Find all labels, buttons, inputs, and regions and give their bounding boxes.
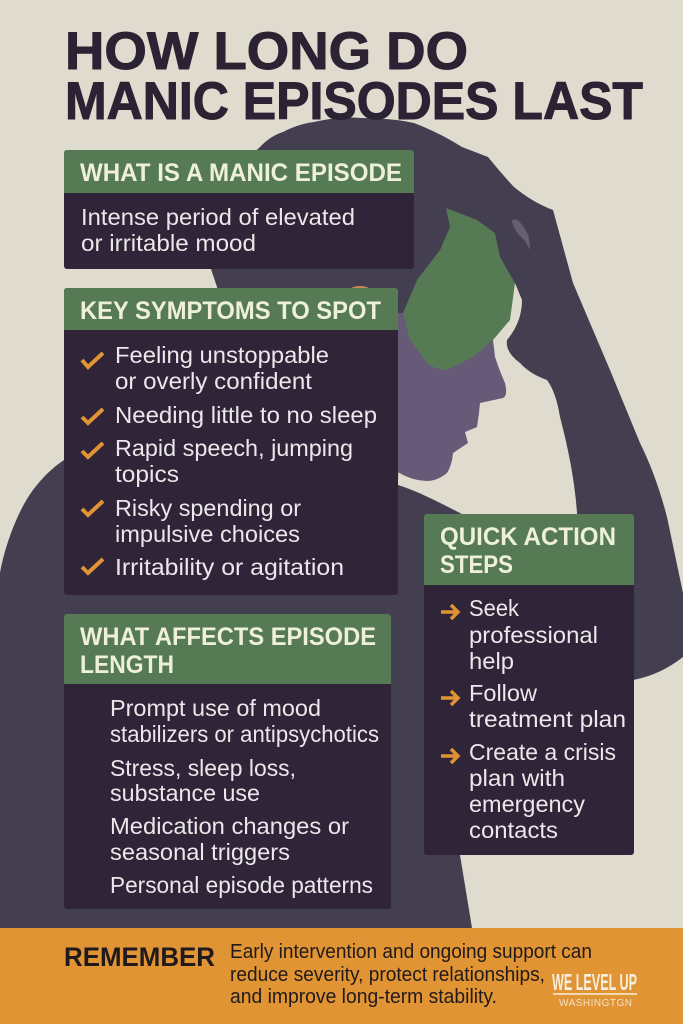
panel: what is a manic episode: WHAT IS A MANIC EPISODE — [80, 159, 402, 187]
silhouette face — [398, 313, 506, 481]
action list: emergency — [469, 791, 586, 817]
logo: WASHINGTGN — [559, 998, 632, 1009]
panel: what affects episode length: LENGTH — [80, 651, 174, 679]
panel: what affects episode length: WHAT AFFECTS EPISODE — [80, 623, 376, 651]
symptom list: Feeling unstoppable — [115, 342, 329, 368]
title: HOW LONG DO — [65, 22, 468, 81]
symptom list: or overly confident — [115, 368, 313, 394]
arrow icons — [441, 605, 458, 763]
panel: quick action steps: QUICK ACTION — [440, 523, 616, 551]
remember label: REMEMBER — [64, 942, 215, 972]
silhouette: person holding head — [0, 118, 683, 928]
symptom list: topics — [115, 461, 179, 487]
panel: what affects episode length: Prompt use of mood — [110, 695, 321, 721]
symptom list: impulsive choices — [115, 521, 300, 547]
panel: what affects episode length: Stress, sleep loss, — [110, 755, 296, 781]
panel: what is a manic episode: Intense period of elevated — [81, 204, 355, 230]
panel: key symptoms — [64, 288, 398, 595]
action list — [469, 595, 626, 843]
title: MANIC EPISODES LAST — [65, 72, 643, 131]
action list: Seek — [469, 595, 519, 621]
panel: what affects episode length: substance use — [110, 780, 260, 806]
remember text — [230, 941, 592, 1008]
green brain shape — [403, 208, 515, 370]
symptom list: Rapid speech, jumping — [115, 435, 353, 461]
panel: what affects episode length: stabilizers or antipsychotics — [110, 721, 379, 747]
silhouette body — [0, 460, 472, 928]
silhouette hair and raised arm — [200, 118, 683, 680]
action list: treatment plan — [469, 706, 626, 732]
action list: Create a crisis — [469, 739, 616, 765]
remember text: Early intervention and ongoing support can — [230, 941, 592, 963]
panel: what is a manic episode — [64, 150, 414, 269]
title — [65, 22, 643, 131]
remember text: and improve long-term stability. — [230, 986, 497, 1008]
action list: help — [469, 648, 514, 674]
logo — [552, 969, 637, 1009]
panel: what affects episode length: Personal episode patterns — [110, 872, 373, 898]
hand highlight — [512, 220, 530, 250]
action list: contacts — [469, 817, 558, 843]
panel: quick action steps: STEPS — [440, 551, 513, 579]
symptom list — [115, 342, 377, 580]
symptom list: Needing little to no sleep — [115, 402, 377, 428]
panel: what affects episode length — [64, 614, 391, 909]
symptom list: Risky spending or — [115, 495, 301, 521]
action list: Follow — [469, 680, 537, 706]
remember text: reduce severity, protect relationships, — [230, 964, 545, 986]
action list: professional — [469, 622, 598, 648]
action list: plan with — [469, 765, 565, 791]
footer banner — [0, 928, 683, 1024]
panel: key symptoms: KEY SYMPTOMS TO SPOT — [80, 297, 381, 325]
panel: what affects episode length: seasonal triggers — [110, 839, 290, 865]
panel: quick action steps — [424, 514, 634, 855]
symptom list: Irritability or agitation — [115, 554, 344, 580]
check icons — [82, 353, 103, 573]
panel: what affects episode length: Medication changes or — [110, 813, 349, 839]
panel: what is a manic episode: or irritable mood — [81, 230, 256, 256]
peach spot — [351, 286, 369, 292]
